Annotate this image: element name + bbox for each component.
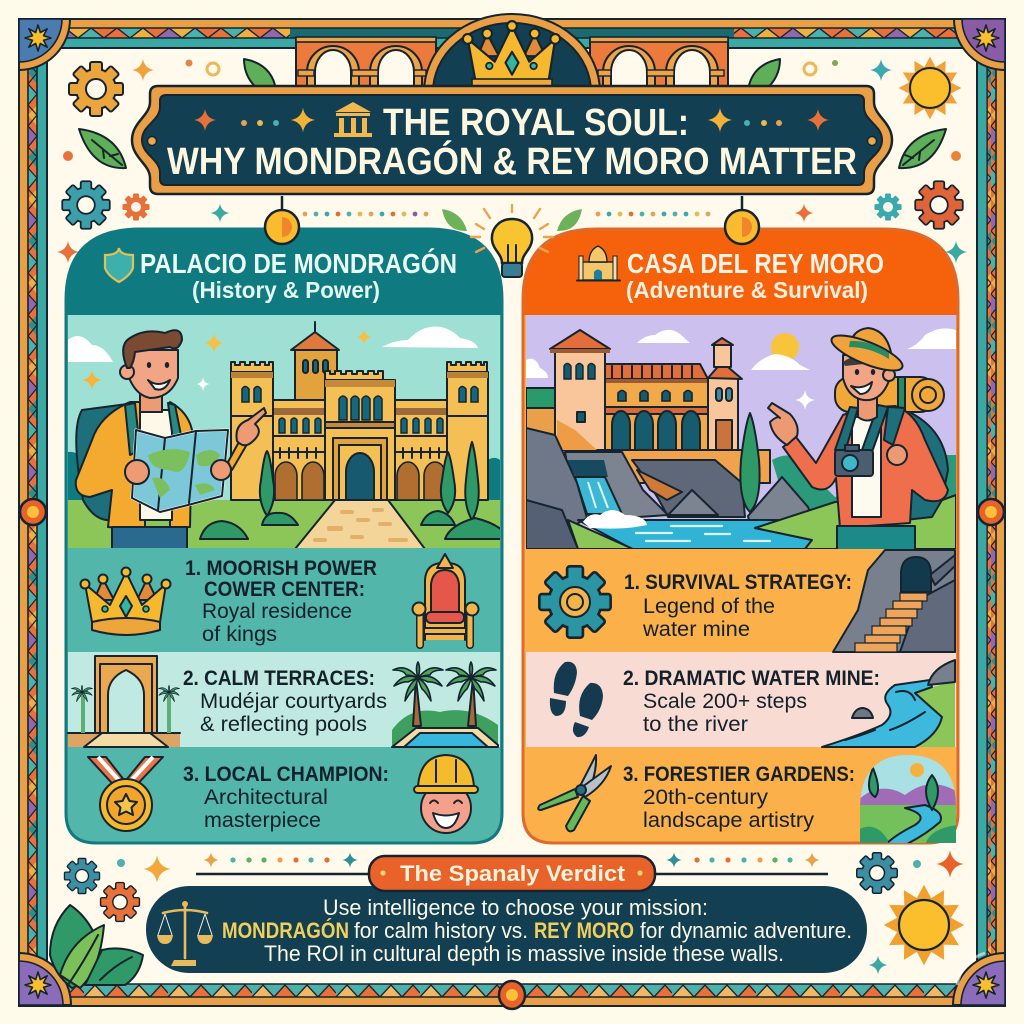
hanger and medallion: left [265,196,299,244]
hanger and medallion: right [725,196,759,244]
item 2: Dramatic water mine: Scale 200+ steps [643,690,807,713]
item 1: Moorish power center [185,557,377,646]
item 3: Forestier gardens: 3. FORESTIER GARDENS: [623,763,855,786]
corner medallion: top right [954,19,1005,70]
icon: throne [412,554,478,645]
corner medallion: top left [19,19,70,70]
title banner: WHY MONDRAGÓN & REY MORO MATTER [167,139,857,183]
aqueduct arches: left [296,37,436,90]
icon: landscape dome [858,755,958,845]
corner medallion: bottom right [953,953,1005,1005]
border medallions [20,499,1004,1009]
panel: Palacio de Mondragón [60,225,510,843]
aqueduct arches: right [590,37,728,90]
verdict rules and dots [196,852,828,874]
panel: Casa del Rey Moro [515,225,965,845]
item 2: Dramatic water mine: 2. DRAMATIC WATER MINE: [623,667,880,690]
decorative icons: lower right [857,850,964,974]
panel heading: Palacio de Mondragón: (History & Power) [192,277,380,303]
decorative icons: upper right [748,57,967,263]
item 2: Calm terraces [183,667,387,736]
icon: teal gear [539,566,611,638]
decorative icons: upper left [57,59,276,263]
item 3: Forestier gardens: 20th-century [643,786,769,809]
item 1: Survival strategy [624,571,852,641]
row 2 background [526,652,956,747]
panel heading: Casa del Rey Moro: (Adventure & Survival) [626,277,868,303]
item 1: Moorish power center: COWER CENTER: [204,578,365,601]
panel heading: Palacio de Mondragón: PALACIO DE MONDRAGÓN [140,248,457,279]
icon: crown [80,568,170,635]
item 2: Calm terraces: 2. CALM TERRACES: [183,667,375,690]
corner medallion: bottom left [19,953,71,1005]
verdict text panel: for dynamic adventure. [640,918,852,943]
icon: winding river [822,660,955,747]
item 1: Moorish power center: of kings [202,623,277,646]
item 1: Survival strategy: 1. SURVIVAL STRATEGY: [624,571,852,594]
item 1: Survival strategy: water mine [642,618,750,641]
title banner: THE ROYAL SOUL: [383,102,689,144]
icon: light bulb [471,205,553,277]
item 1: Survival strategy: Legend of the [643,595,775,618]
decorative icons: lower left [50,855,171,988]
item 3: Local champion: Architectural [204,786,328,809]
verdict heading pill: The Spanaly Verdict [400,861,626,886]
title banner [132,86,892,194]
dotted connector: left [303,212,428,216]
verdict text panel: for calm history vs. [354,918,528,943]
row 2 background [68,652,500,747]
leaves beside bulb [442,209,582,231]
verdict text panel: The ROI in cultural depth is massive inside these walls. [264,941,784,966]
item 3: Local champion: masterpiece [204,809,321,832]
icon: garden shears [538,755,611,831]
illustration: Mondragón palace and traveller with map [66,315,502,550]
item 3: Local champion: 3. LOCAL CHAMPION: [183,763,389,786]
illustration: Rey Moro house, water mine and hiker [523,315,959,550]
item 2: Calm terraces: Mudéjar courtyards [200,690,387,713]
icon: smiling builder [414,755,478,833]
crown medallion arch [424,14,600,92]
panel heading: Casa del Rey Moro [577,246,884,303]
verdict text panel: MONDRAGÓN [222,918,349,943]
item 3: Forestier gardens: landscape artistry [643,809,815,832]
verdict heading pill [369,856,655,891]
icon: gold medal [88,757,163,831]
icon: balance scale [157,901,213,966]
icon: palms and reflecting pool [392,662,498,747]
item 1: Moorish power center: Royal residence [202,600,352,623]
icon: arch gate with palms [68,656,180,747]
verdict text panel [146,886,867,973]
panel heading: Casa del Rey Moro: CASA DEL REY MORO [627,248,884,279]
item 3: Forestier gardens [623,763,855,832]
verdict text panel: REY MORO [534,918,634,943]
item 2: Dramatic water mine [623,667,880,736]
item 2: Dramatic water mine: to the river [643,713,748,736]
icon: cliff stairs [833,550,955,652]
item 2: Calm terraces: & reflecting pools [200,713,367,736]
verdict text panel: Use intelligence to choose your mission: [323,895,708,920]
item 1: Moorish power center: 1. MOORISH POWER [185,557,377,580]
item 3: Local champion [183,763,389,832]
icon: footprints [550,662,603,737]
dotted connector: right [596,212,710,216]
panel heading: Palacio de Mondragón [105,248,457,303]
